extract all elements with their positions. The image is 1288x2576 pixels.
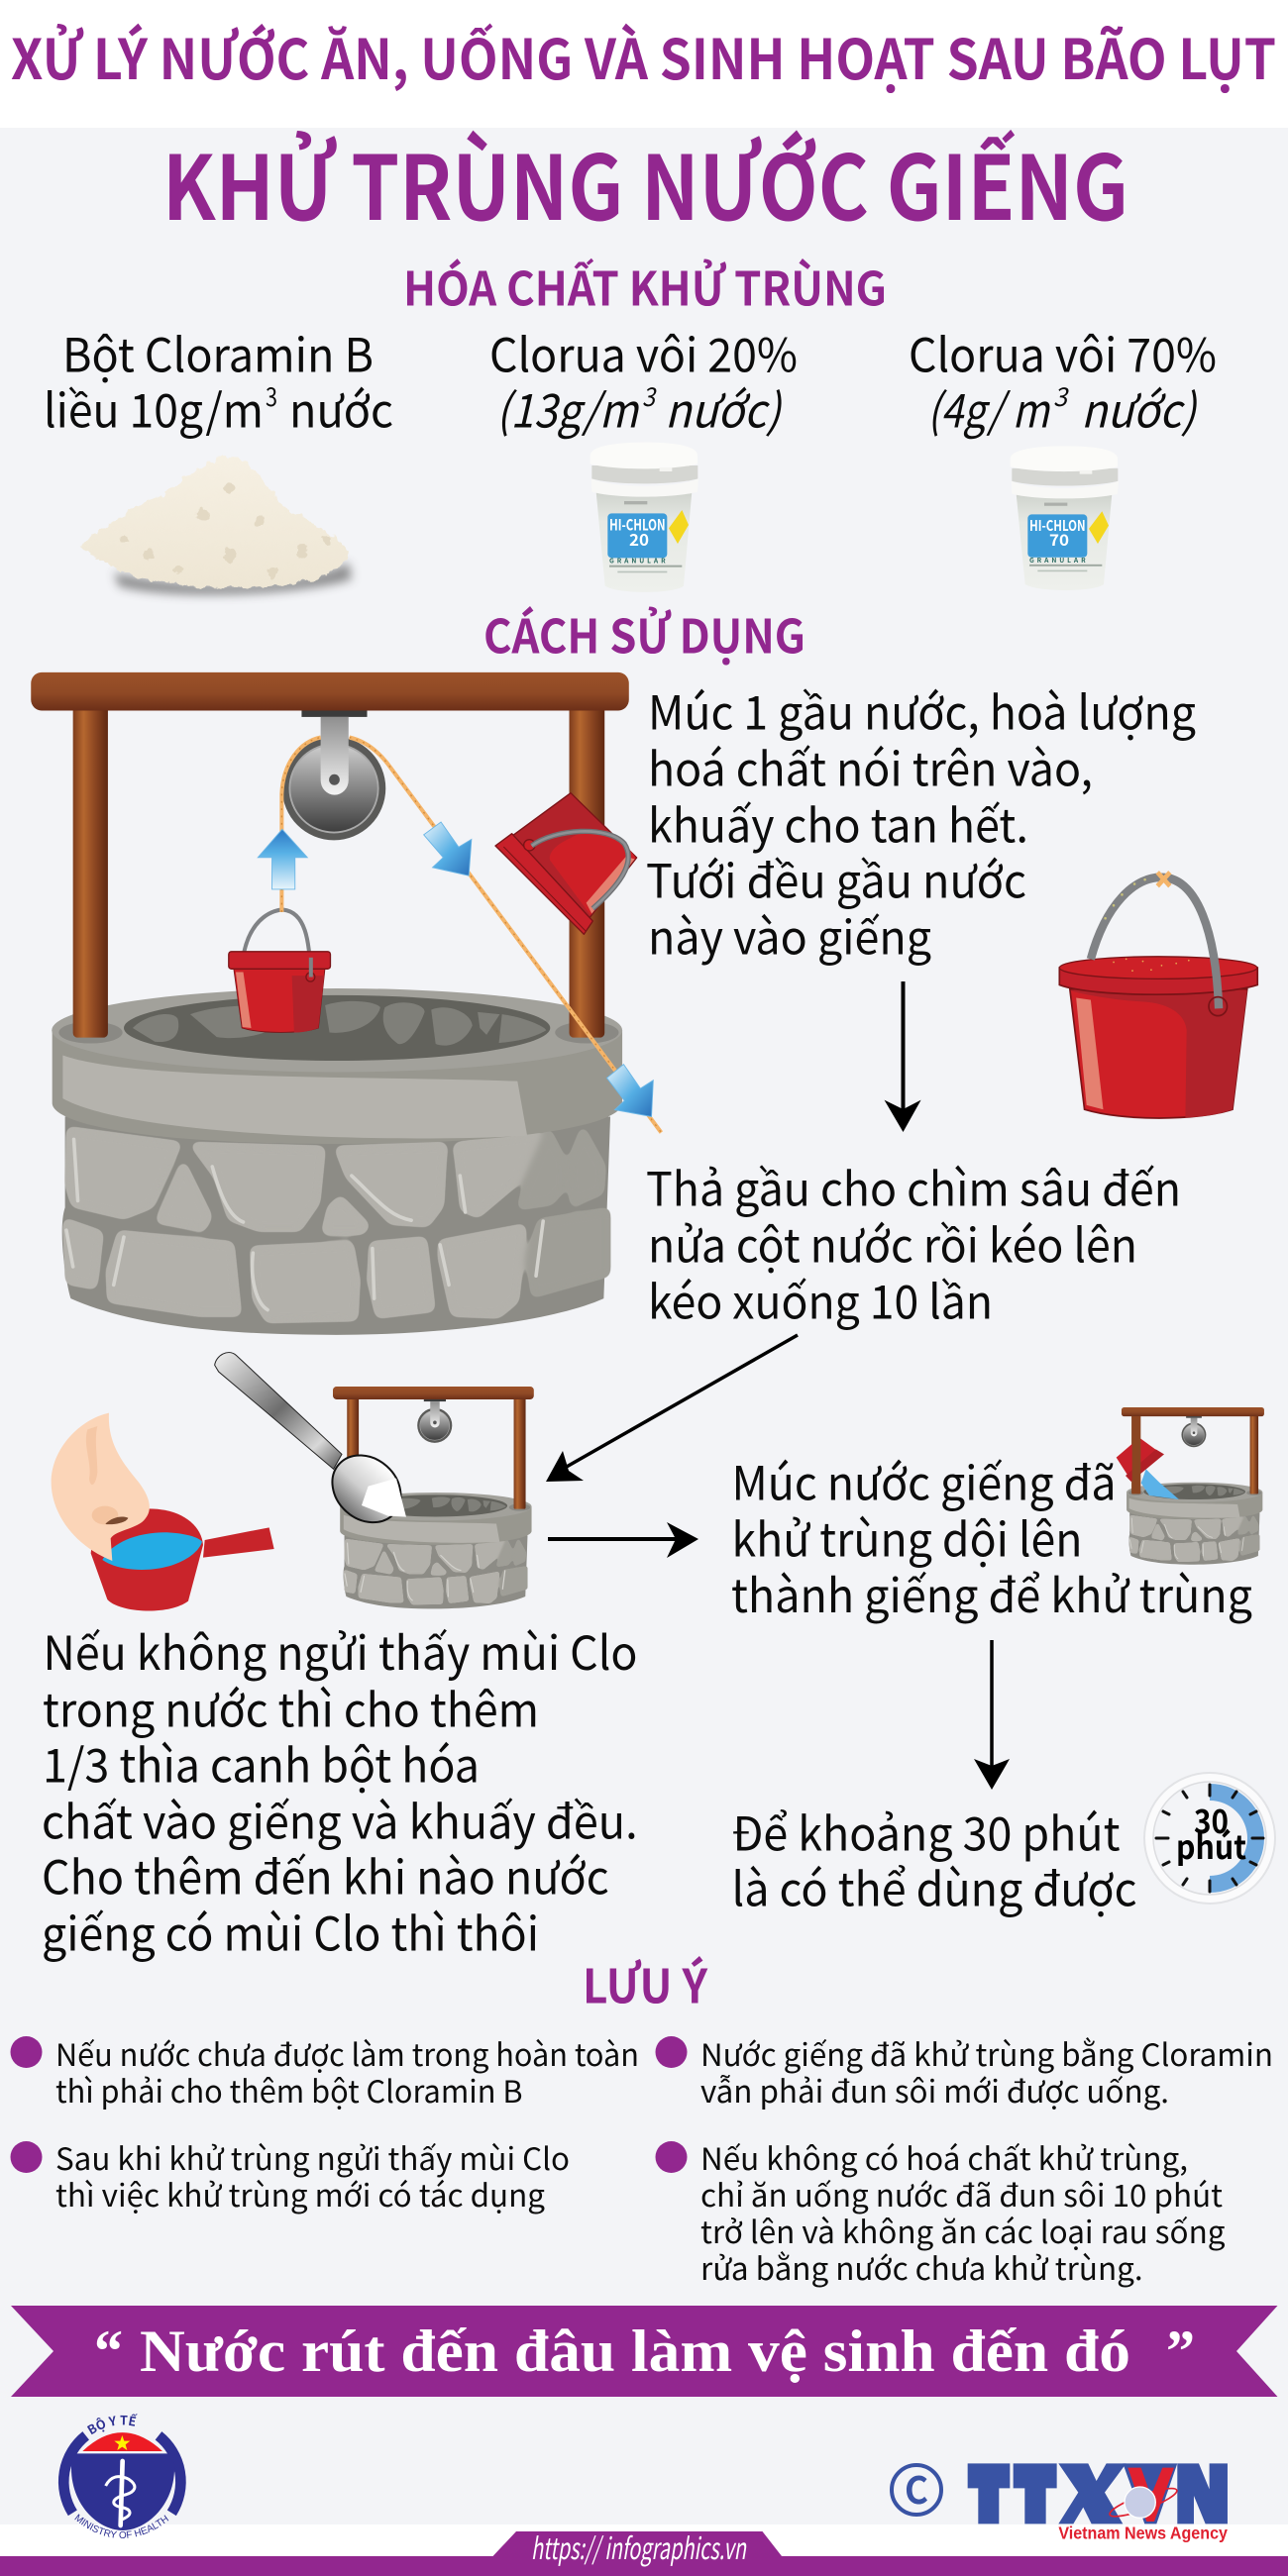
icon: small well with spoon	[215, 1353, 534, 1608]
logo: Ministry of Health	[57, 2414, 186, 2538]
icon: powder pile	[79, 456, 352, 594]
logo: Ministry of Health: BỘ Y TẾ	[87, 2414, 137, 2434]
note 2: thì việc khử trùng mới có tác dụng	[55, 2171, 546, 2215]
note 3: vẫn phải đun sôi mới được uống.	[700, 2067, 1169, 2112]
arrow: smell check to rinse	[548, 1522, 698, 1558]
text: smell check: Cho thêm đến khi nào nước	[42, 1840, 609, 1907]
text: smell check: giếng có mùi Clo thì thôi	[42, 1896, 539, 1965]
chemical: Clorua vôi 70% label: 3	[1053, 377, 1069, 414]
text: rinse well wall: Múc nước giếng đã	[731, 1446, 1116, 1513]
footer band: https:// infographics.vn	[531, 2524, 747, 2568]
chemical: Clorua vôi 70% label: nước)	[1081, 372, 1198, 442]
note 3: Nước giếng đã khử trùng bằng Cloramin	[700, 2030, 1273, 2075]
note 2: Sau khi khử trùng ngửi thấy mùi Clo	[55, 2134, 570, 2179]
banner: slogan	[11, 2306, 1278, 2397]
text: smell check	[42, 1615, 638, 1965]
icon: red bucket with chemical	[1059, 873, 1257, 1118]
icon: HI-CHLON 20 drum	[590, 443, 698, 592]
icon: HI-CHLON 70 drum	[1011, 446, 1119, 590]
icon: small well with tipped bucket	[1117, 1407, 1264, 1565]
text: wait 30 minutes	[731, 1797, 1137, 1919]
text: step 1	[646, 675, 1196, 969]
text: rinse well wall: thành giếng để khử trùng	[731, 1558, 1252, 1626]
text: step 1: Tưới đều gầu nước	[646, 844, 1026, 911]
arrow: rinse to wait	[974, 1640, 1010, 1790]
footer band	[0, 2524, 1288, 2576]
icon: 30 minute clock: 30	[1194, 1796, 1229, 1843]
arrow: up	[258, 829, 307, 889]
chemical: Clorua vôi 20% label	[489, 317, 798, 442]
banner: slogan: “	[94, 2318, 123, 2384]
chemical: Cloramin B label	[44, 317, 393, 442]
icon: HI-CHLON 70 drum: GRANULAR	[1029, 555, 1086, 565]
icon: HI-CHLON 70 drum: 70	[1049, 527, 1069, 551]
hanging red bucket	[229, 910, 330, 1033]
icon: 30 minute clock	[1144, 1773, 1275, 1904]
text: wait 30 minutes: là có thể dùng được	[731, 1852, 1137, 1919]
chemical: Clorua vôi 20% label: (13g/m	[496, 372, 640, 442]
logo: copyright mark: C	[905, 2460, 928, 2515]
logo: TTXVN: Vietnam News Agency	[1058, 2523, 1228, 2542]
arrow: rope down 2	[606, 1065, 653, 1116]
text: step 2	[646, 1151, 1181, 1333]
logo: TTXVN	[968, 2463, 1228, 2542]
arrow: rope down 1	[424, 822, 472, 876]
icon: HI-CHLON 20 drum: HI-CHLON	[609, 514, 666, 536]
section heading: usage: CÁCH SỬ DỤNG	[483, 598, 805, 668]
text: smell check: 1/3 thìa canh bột hóa	[43, 1727, 480, 1797]
note 1: thì phải cho thêm bột Cloramin B	[55, 2067, 523, 2112]
icon: HI-CHLON 20 drum: GRANULAR	[609, 556, 666, 566]
note 1: Nếu nước chưa được làm trong hoàn toàn	[55, 2030, 639, 2075]
spoon	[215, 1353, 414, 1536]
note 2	[10, 2134, 570, 2215]
chemical: Clorua vôi 70% label	[909, 317, 1217, 442]
logo: copyright mark	[892, 2460, 941, 2515]
section heading: notes: LƯU Ý	[583, 1949, 708, 2016]
note 3	[656, 2030, 1273, 2112]
banner: slogan: Nước rút đến đâu làm vệ sinh đến đó	[140, 2318, 1130, 2384]
logo: Ministry of Health: MINISTRY OF HEALTH	[74, 2514, 168, 2538]
text: rinse well wall: khử trùng dội lên	[731, 1501, 1082, 1571]
section heading: chemicals: HÓA CHẤT KHỬ TRÙNG	[403, 252, 887, 319]
chemical: Cloramin B label: 3	[266, 377, 277, 414]
top title band	[0, 0, 1288, 128]
icon: 30 minute clock: phút	[1176, 1821, 1246, 1869]
text: smell check: chất vào giếng và khuấy đều.	[42, 1785, 638, 1852]
chemical: Cloramin B label: nước	[289, 372, 393, 442]
text: smell check: Nếu không ngửi thấy mùi Clo	[44, 1615, 638, 1684]
chemical: Cloramin B label: Bột Cloramin B	[62, 317, 374, 386]
tipped red bucket	[495, 793, 637, 934]
illustration: large well with pulley and buckets	[31, 672, 661, 1335]
text: step 2: kéo xuống 10 lần	[648, 1264, 993, 1333]
chemical: Clorua vôi 20% label: nước)	[665, 372, 783, 442]
rope	[281, 738, 661, 1133]
chemical: Clorua vôi 20% label: Clorua vôi 20%	[489, 317, 798, 386]
note 4: rửa bằng nước chưa khử trùng.	[700, 2244, 1143, 2289]
note 4	[656, 2134, 1226, 2289]
main heading: KHỬ TRÙNG NƯỚC GIẾNG	[162, 117, 1128, 246]
note 1	[10, 2030, 639, 2112]
icon: HI-CHLON 20 drum: 20	[629, 527, 649, 551]
icon: nose and red scoop	[52, 1413, 274, 1611]
text: step 2: nửa cột nước rồi kéo lên	[648, 1208, 1137, 1276]
arrow: step 2 to smell check	[546, 1335, 798, 1482]
chemical: Clorua vôi 70% label: Clorua vôi 70%	[909, 317, 1217, 386]
text: step 1: Múc 1 gầu nước, hoà lượng	[648, 675, 1196, 743]
banner: slogan: ”	[1166, 2318, 1195, 2384]
text: step 1: này vào giếng	[648, 899, 931, 969]
chemical: Clorua vôi 70% label: (4g/ m	[927, 372, 1051, 442]
text: step 1: khuấy cho tan hết.	[648, 788, 1028, 856]
text: wait 30 minutes: Để khoảng 30 phút	[731, 1797, 1121, 1864]
text: step 1: hoá chất nói trên vào,	[648, 731, 1093, 800]
text: smell check: trong nước thì cho thêm	[43, 1672, 539, 1741]
arrow: step 1 to step 2	[884, 981, 921, 1132]
chemical: Clorua vôi 20% label: 3	[642, 377, 657, 414]
chemical: Cloramin B label: liều 10g/m	[44, 372, 264, 442]
note 4: chỉ ăn uống nước đã đun sôi 10 phút	[700, 2171, 1223, 2215]
icon: HI-CHLON 70 drum: HI-CHLON	[1029, 515, 1086, 536]
text: step 2: Thả gầu cho chìm sâu đến	[646, 1151, 1181, 1220]
text: rinse well wall	[731, 1446, 1252, 1626]
note 4: trở lên và không ăn các loại rau sống	[700, 2208, 1226, 2252]
note 4: Nếu không có hoá chất khử trùng,	[700, 2134, 1188, 2179]
